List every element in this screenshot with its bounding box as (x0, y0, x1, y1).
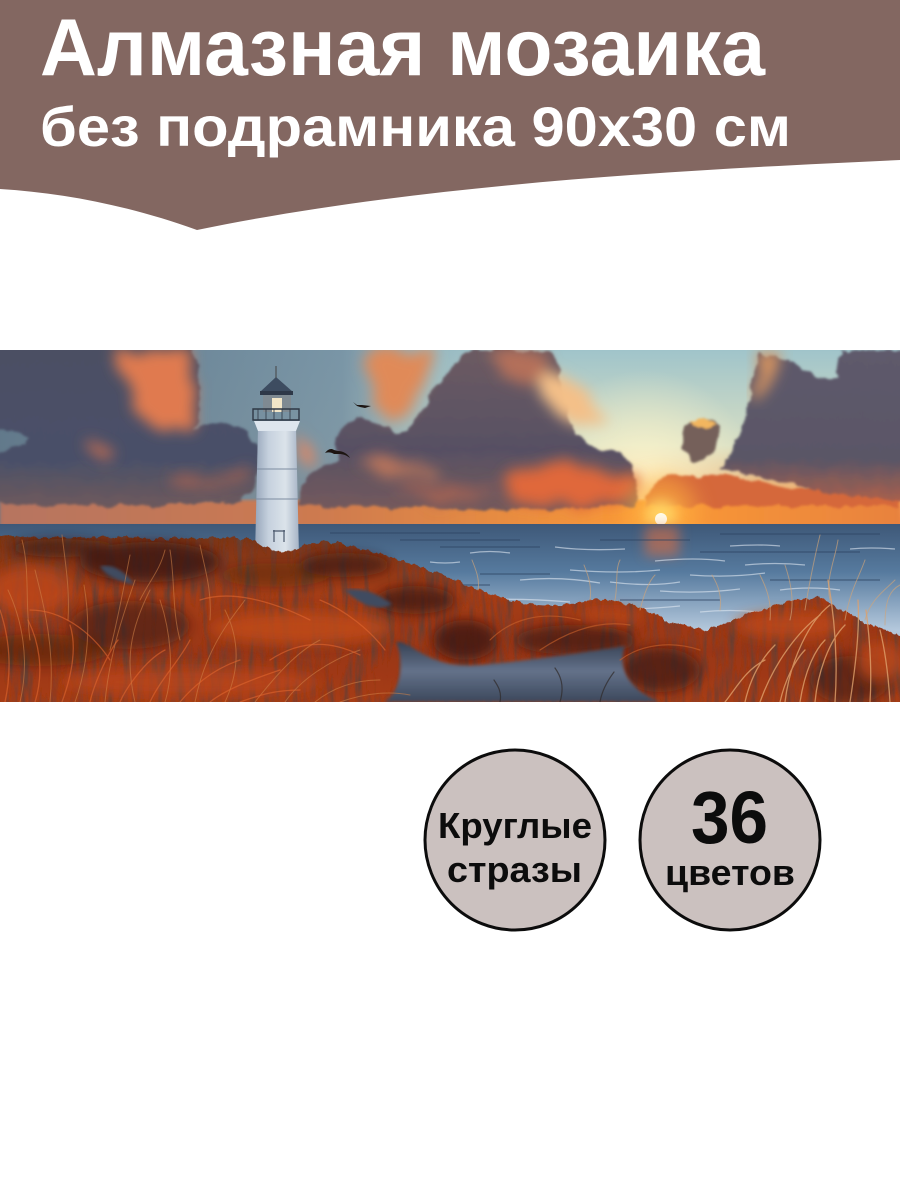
banner shape (0, 0, 900, 230)
picture: lighthouse on dunes at sunset (0, 350, 900, 702)
grass blades (0, 535, 900, 702)
cloud glow left (85, 350, 318, 490)
shaded grass patches (0, 539, 890, 704)
badge: round rhinestones: Круглые (438, 805, 592, 846)
badge: round rhinestones (425, 750, 605, 930)
clouds left (0, 340, 259, 506)
sea (0, 524, 900, 636)
subtitle: без подрамника 90х30 см (40, 95, 791, 158)
badge: 36 colours (640, 750, 820, 930)
cloud highlights centre (355, 350, 636, 505)
birds (325, 402, 371, 458)
sky (0, 350, 900, 526)
badge: 36 colours: 36 (691, 776, 768, 859)
sand path (100, 566, 660, 702)
cloud highlight right (755, 352, 785, 398)
clouds centre (300, 350, 900, 509)
bright grass highlights (0, 566, 900, 696)
dunes with orange grass (0, 535, 900, 712)
badge: round rhinestones: стразы (447, 849, 582, 890)
lighthouse (253, 366, 300, 556)
badges (424, 748, 822, 932)
header banner with title (0, 0, 900, 230)
badge: 36 colours: цветов (665, 852, 795, 893)
clouds right (682, 350, 900, 500)
title: Алмазная мозаика (40, 3, 766, 93)
sun (625, 476, 697, 548)
